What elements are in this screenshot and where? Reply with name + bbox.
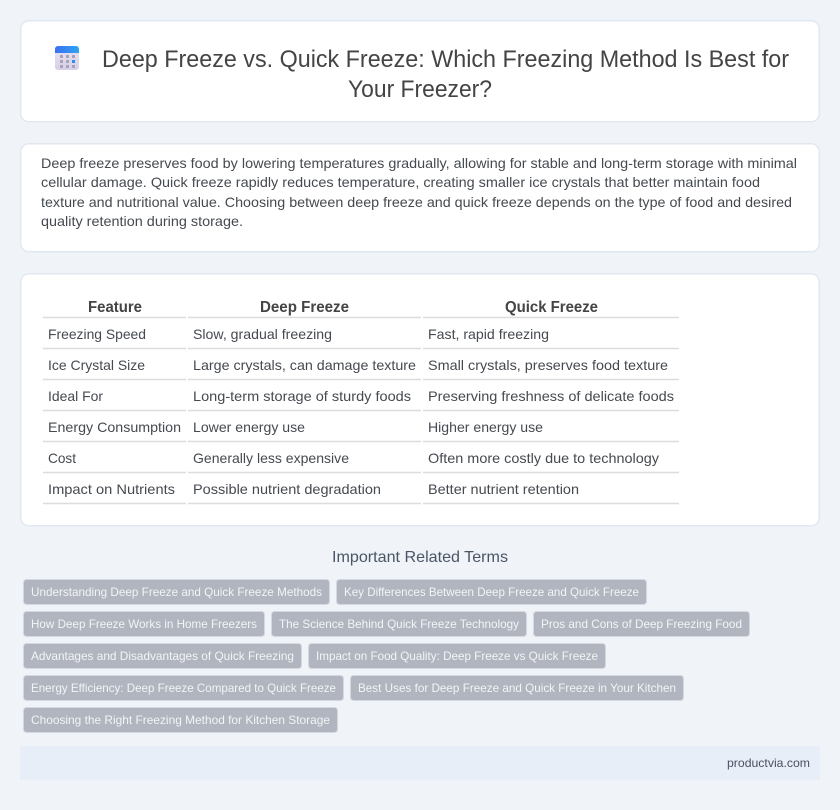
row: cost (48, 450, 659, 466)
table header row: Feature (88, 299, 142, 316)
chip (24, 708, 338, 732)
title (102, 46, 789, 103)
chip (308, 644, 606, 668)
chip: Energy Efficiency: Deep Freeze Compared to Quick Freeze (31, 681, 336, 695)
intro paragraph: quality retention during storage. (41, 213, 243, 229)
related terms chips (24, 580, 750, 732)
chip: Advantages and Disadvantages of Quick Freezing (31, 649, 294, 663)
row: cost: Generally less expensive (193, 450, 349, 466)
chip: How Deep Freeze Works in Home Freezers (31, 617, 257, 631)
row: impact on nutrients: Better nutrient retention (428, 481, 579, 497)
row: ice crystal size (48, 357, 668, 373)
chip: Impact on Food Quality: Deep Freeze vs Quick Freeze (316, 649, 598, 663)
chip (24, 580, 330, 604)
row: energy consumption (48, 419, 543, 435)
row: impact on nutrients (48, 481, 579, 497)
table header row: Deep Freeze (260, 299, 349, 316)
intro paragraph (41, 155, 797, 229)
table header row: Quick Freeze (505, 299, 598, 316)
footer source text: productvia.com (727, 756, 810, 770)
row: ice crystal size: Small crystals, preserves food texture (428, 357, 668, 373)
row: freezing speed: Slow, gradual freezing (193, 326, 332, 342)
row: cost: Often more costly due to technology (428, 450, 659, 466)
row: ice crystal size: Ice Crystal Size (48, 357, 145, 373)
chip (350, 676, 684, 700)
chip: The Science Behind Quick Freeze Technology (279, 617, 519, 631)
chip: Pros and Cons of Deep Freezing Food (541, 617, 742, 631)
title: Your Freezer? (348, 76, 492, 103)
intro paragraph: texture and nutritional value. Choosing between deep freeze and quick freeze depends on the type of food and desired (41, 194, 792, 210)
chip: Key Differences Between Deep Freeze and Quick Freeze (344, 585, 639, 599)
chip (24, 644, 302, 668)
row: freezing speed (48, 326, 549, 342)
row: ideal for: Long-term storage of sturdy foods (193, 388, 411, 404)
panel: header (21, 21, 819, 122)
row: ideal for: Preserving freshness of delicate foods (428, 388, 674, 404)
icon: calendar (55, 46, 79, 70)
title: Deep Freeze vs. Quick Freeze: Which Freezing Method Is Best for (102, 46, 789, 73)
row: impact on nutrients: Impact on Nutrients (48, 481, 175, 497)
chip: Understanding Deep Freeze and Quick Freeze Methods (31, 585, 322, 599)
chip: Best Uses for Deep Freeze and Quick Freeze in Your Kitchen (358, 681, 676, 695)
row: ice crystal size: Large crystals, can damage texture (193, 357, 416, 373)
row: impact on nutrients: Possible nutrient degradation (193, 481, 381, 497)
row: energy consumption: Lower energy use (193, 419, 305, 435)
chip (24, 676, 344, 700)
panel: introduction (21, 144, 819, 252)
chip (24, 612, 264, 636)
row: freezing speed: Fast, rapid freezing (428, 326, 549, 342)
row: ideal for (48, 388, 674, 404)
chip: Choosing the Right Freezing Method for Kitchen Storage (31, 713, 330, 727)
chip (272, 612, 526, 636)
panel: comparison table (21, 274, 819, 526)
row: cost: Cost (48, 450, 76, 466)
intro paragraph: Deep freeze preserves food by lowering temperatures gradually, allowing for stable and long-term storage with minimal (41, 155, 797, 171)
row: energy consumption: Energy Consumption (48, 419, 181, 435)
table header row (88, 299, 598, 316)
intro paragraph: cellular damage. Quick freeze rapidly reduces temperature, creating smaller ice crystals that better maintain food (41, 174, 760, 190)
chip (534, 612, 750, 636)
row: ideal for: Ideal For (48, 388, 103, 404)
heading: related terms: Important Related Terms (332, 549, 508, 566)
row: energy consumption: Higher energy use (428, 419, 543, 435)
footer bar (20, 746, 820, 780)
row: freezing speed: Freezing Speed (48, 326, 146, 342)
chip (336, 580, 646, 604)
